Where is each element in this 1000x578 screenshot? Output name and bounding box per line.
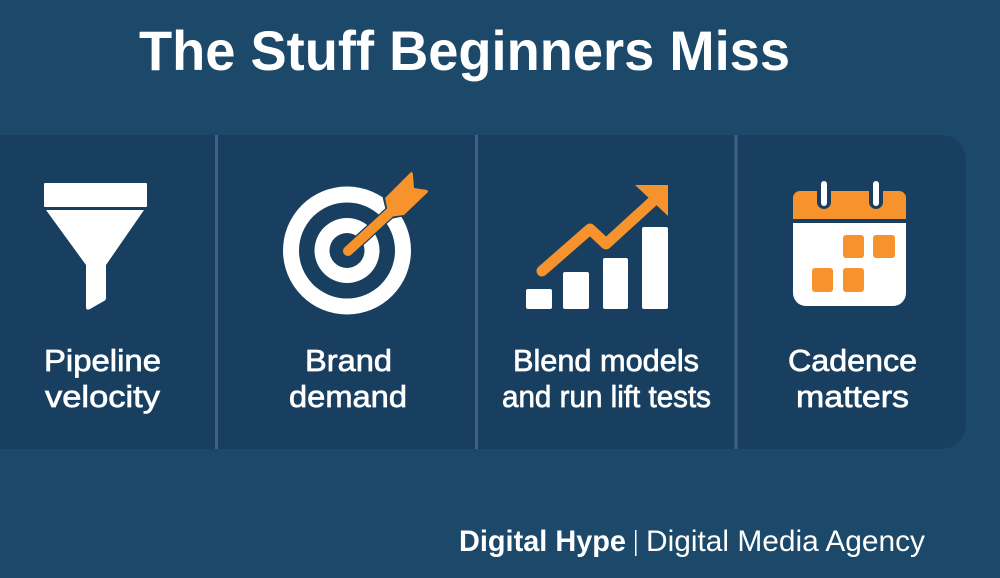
label: cadence matters bbox=[788, 343, 917, 414]
label: brand demand bbox=[289, 343, 407, 414]
icon: calendar bbox=[793, 179, 906, 306]
footer: brand line bbox=[459, 525, 925, 558]
title: The Stuff Beginners Miss bbox=[139, 19, 790, 82]
label: blend models and run lift tests: Blend models bbox=[513, 343, 699, 378]
label: cadence matters: matters bbox=[796, 379, 909, 414]
label: blend models and run lift tests bbox=[502, 343, 711, 414]
label: pipeline velocity bbox=[44, 343, 161, 414]
label: pipeline velocity: Pipeline bbox=[44, 343, 161, 378]
label: blend models and run lift tests: and run lift tests bbox=[502, 379, 711, 414]
icon: target with arrow bbox=[283, 171, 428, 314]
label: brand demand: Brand bbox=[305, 343, 392, 378]
label: brand demand: demand bbox=[289, 379, 407, 414]
label: cadence matters: Cadence bbox=[788, 343, 917, 378]
icon: rising bar chart bbox=[526, 185, 668, 309]
footer: brand line: Digital Hype bbox=[459, 525, 626, 558]
footer: brand line: Digital Media Agency bbox=[646, 525, 925, 558]
panel: four factors bbox=[0, 135, 966, 449]
label: pipeline velocity: velocity bbox=[45, 379, 161, 414]
icon: funnel bbox=[44, 183, 147, 310]
